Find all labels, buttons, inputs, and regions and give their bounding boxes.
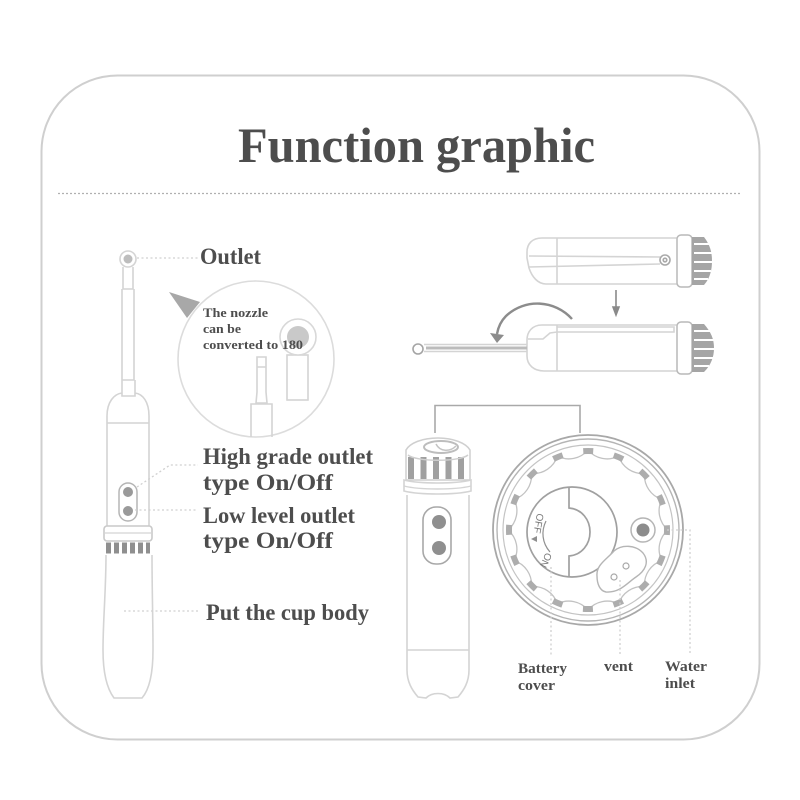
cup body	[103, 555, 153, 698]
label: low level type: type On/Off	[203, 528, 333, 553]
label: high grade outlet: High grade outlet	[203, 444, 373, 469]
icon: upright nozzle	[251, 357, 272, 437]
brush head	[404, 438, 471, 494]
icon: outlet head	[120, 251, 136, 267]
text: on: ON	[537, 551, 553, 569]
button pill	[423, 507, 451, 564]
arrow: rotation	[490, 304, 572, 343]
icon: lock arrow	[531, 536, 537, 542]
arrow: down	[613, 290, 619, 315]
left device: side view	[103, 251, 153, 698]
vent	[597, 546, 646, 592]
dial: top view	[493, 435, 683, 625]
icon: rotated nozzle	[280, 319, 316, 400]
label: low level outlet: Low level outlet	[203, 503, 355, 528]
detail circle: nozzle rotation	[169, 281, 334, 437]
text: off: OFF	[531, 512, 545, 534]
label: outlet: Outlet	[200, 244, 261, 269]
water inlet port	[631, 518, 655, 542]
dial leader lines	[551, 530, 690, 655]
callout leader lines	[124, 258, 198, 611]
battery cover	[527, 487, 617, 577]
top right device: nozzle stored	[527, 235, 712, 287]
label: water: Water	[665, 659, 707, 675]
panel: rounded frame	[42, 76, 760, 740]
label: battery: Battery	[518, 661, 568, 677]
icon: callout pointer	[169, 292, 200, 318]
connector line	[435, 406, 580, 433]
label: high grade type: type On/Off	[203, 470, 333, 495]
label: vent: vent	[604, 659, 633, 675]
button pill	[119, 483, 137, 521]
title: Function graphic	[238, 117, 595, 173]
bottom right device: nozzle extended	[413, 322, 714, 374]
nozzle	[122, 267, 135, 396]
label: put the cup body: Put the cup body	[206, 600, 369, 625]
middle device: front view	[404, 438, 471, 698]
collar ring	[104, 526, 152, 548]
text: nozzle note line 2: can be	[203, 321, 241, 336]
text: nozzle note line 3: converted to 180	[203, 337, 303, 352]
label: cover: cover	[518, 678, 555, 694]
text: nozzle note: The nozzle	[203, 305, 268, 320]
label: inlet: inlet	[665, 676, 695, 692]
upper body	[107, 393, 149, 527]
